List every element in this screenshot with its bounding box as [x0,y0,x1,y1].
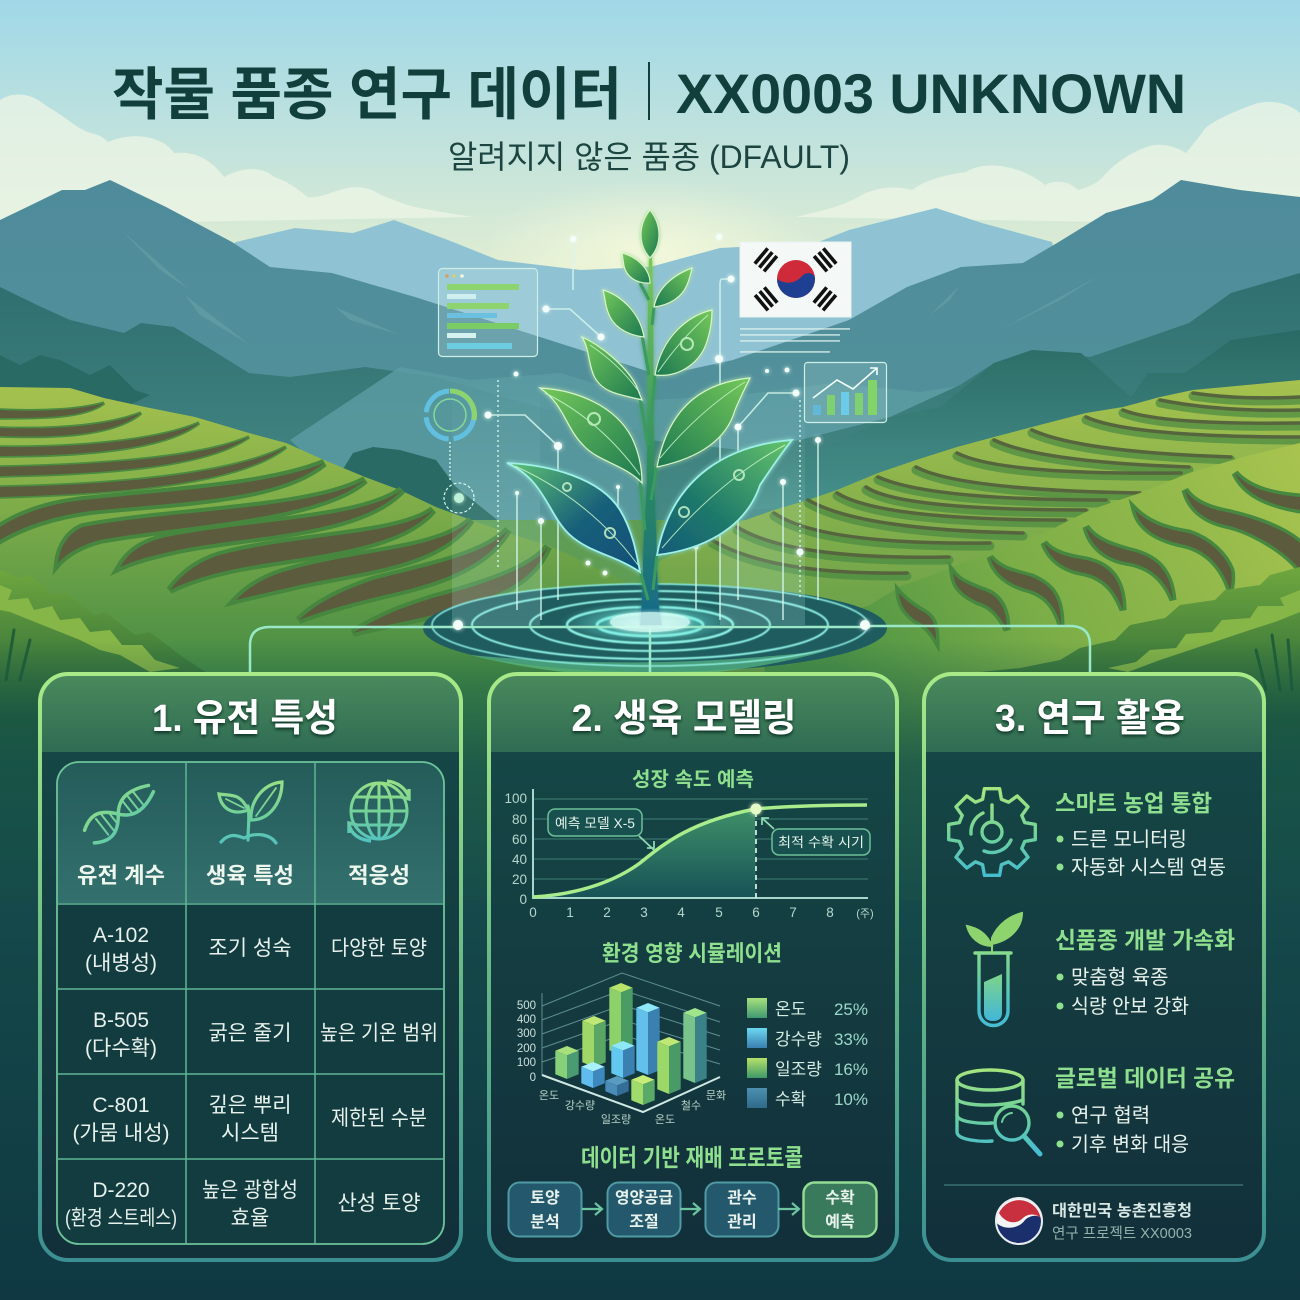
panel 2: growth modeling [489,674,897,1260]
panel 2 heading: 2. 생육 모델링 [572,698,796,740]
title [112,62,1186,127]
x axis labels: 3 [640,905,648,920]
table rows [65,924,438,1230]
step: yield forecast: 수확 [825,1189,855,1207]
left big mountain [0,180,648,432]
bars [555,983,707,1105]
right back terrace brown lines [712,393,1300,573]
y axis labels: 60 [512,832,527,847]
subtitle: 알려지지 않은 품종 (DFAULT) [448,139,850,175]
item: global data: 연구 협력 [1071,1104,1150,1127]
chart legend: 25% [834,1000,868,1019]
table rows: A-102 [93,924,149,947]
y axis labels: 100 [504,791,527,806]
title separator [648,62,650,120]
x axis labels: 4 [677,905,685,920]
chart legend: 일조량 [775,1060,822,1079]
lower dark background [0,640,1300,1300]
protocol flow [508,1182,876,1236]
callout: prediction model: 예측 모델 X-5 [555,816,635,831]
chart title: environment simulation: 환경 영향 시뮬레이션 [602,941,782,966]
line chart [504,789,874,920]
arrow [680,1203,700,1215]
panel 1: genetic traits [40,674,461,1260]
step: nutrient control: 조절 [629,1213,659,1231]
callout: optimal harvest [762,818,870,855]
bar chart y labels: 400 [517,1014,536,1026]
table header labels: 적응성 [348,863,410,888]
table rows: (다수확) [85,1037,157,1060]
item: smart farming: 자동화 시스템 연동 [1071,856,1226,879]
bar chart x labels: 철수 [681,1099,701,1112]
bar chart y labels [517,1000,536,1084]
bar chart x labels: 온도 [539,1089,559,1102]
step: soil analysis: 분석 [530,1213,560,1231]
grass dark blades [6,630,1292,690]
small target ring [444,483,474,513]
title code part: XX0003 UNKNOWN [676,62,1186,125]
icon: globe [349,781,409,841]
light blue back mountains [234,208,1053,376]
item: new variety: 신품종 개발 가속화 [1055,927,1235,953]
x axis labels: 2 [603,905,611,920]
callout: optimal harvest: 최적 수확 시기 [778,835,864,850]
panel 3 heading: 3. 연구 활용 [995,698,1185,740]
item: global data [957,1065,1235,1156]
chart legend: 수확 [775,1090,806,1109]
bar chart x labels: 온도 [655,1113,675,1126]
bar chart y labels: 100 [517,1057,536,1069]
right big mountain [654,180,1300,450]
project code: 연구 프로젝트 XX0003 [1052,1225,1192,1242]
item: new variety: 식량 안보 강화 [1071,995,1189,1018]
growth chart card [804,362,886,422]
item: global data: 글로벌 데이터 공유 [1055,1065,1235,1091]
table rows: (환경 스트레스) [65,1207,177,1230]
step: nutrient control: 영양공급 [615,1189,673,1207]
right front terrace steps [899,473,1300,640]
panel 3 header band [924,674,1264,752]
plant stem [640,255,662,625]
step: nutrient control [608,1182,680,1236]
plant branches [640,283,657,600]
glow behind plant [480,180,820,320]
panel 1 header band [40,674,461,752]
valley base [472,520,746,584]
table rows: 효율 [231,1207,269,1230]
trait table [57,762,444,1244]
arrow [582,1203,602,1215]
agency name: 대한민국 농촌진흥청 [1052,1202,1192,1220]
bar chart x labels: 일조량 [601,1112,631,1126]
step: irrigation: 관수 [727,1189,757,1207]
item: smart farming: 스마트 농업 통합 [1055,790,1212,816]
connector lines to panels [250,625,1090,672]
far forest ridges [0,287,394,450]
x axis labels: 6 [752,905,760,920]
x axis labels: 8 [826,905,834,920]
3D bar chart [517,973,726,1126]
item: new variety: 맞춤형 육종 [1071,966,1169,989]
step: irrigation [706,1182,778,1236]
protocol title: 데이터 기반 재배 프로토콜 [581,1145,803,1172]
central glow [610,612,690,632]
step: soil analysis [508,1182,582,1236]
x axis labels [529,905,874,920]
foreground grass [0,570,205,765]
step: yield forecast [804,1182,876,1236]
item: smart farming: 드른 모니터링 [1071,828,1187,851]
x axis labels: (주) [856,908,874,920]
hologram data dots [484,234,821,576]
clouds [0,95,1300,225]
icon: government emblem [996,1198,1042,1245]
data ring gauge [426,391,475,439]
hologram data lines [450,239,818,620]
left mountain facet [121,230,400,345]
plant [507,210,792,625]
table header labels [77,863,410,888]
table rows: C-801 [92,1094,150,1117]
connector node dots [453,620,870,630]
table rows: 높은 광합성 [202,1179,298,1202]
icon: database with magnifier [957,1070,1040,1154]
bar chart y labels: 200 [517,1043,536,1055]
table rows: (가뭄 내성) [72,1122,170,1145]
icon: test tube [967,913,1022,1026]
y axis labels [504,791,527,907]
hologram light columns [452,360,805,625]
data card: dashboard [438,268,538,356]
chart legend: 강수량 [775,1030,822,1049]
bar chart y labels: 300 [517,1028,536,1040]
table rows: 산성 토양 [337,1192,421,1215]
grass highlights [0,585,1300,672]
y axis labels: 20 [512,872,527,887]
chart legend: 10% [834,1090,868,1109]
panel 2 header band [489,674,897,752]
x axis labels: 7 [789,905,797,920]
y axis labels: 80 [512,812,527,827]
table rows: B-505 [93,1009,149,1032]
item: smart farming [949,789,1226,879]
plant leaves [507,210,792,572]
item: new variety [967,913,1235,1026]
bar chart y labels: 0 [530,1072,536,1084]
table rows: 시스템 [221,1122,279,1145]
table rows: 굵은 줄기 [208,1022,292,1045]
near dark forest [0,355,510,530]
y axis labels: 40 [512,852,527,867]
icon: sprout [219,782,282,843]
Korean flag [740,242,851,317]
table rows: 조기 성숙 [208,937,292,960]
flag caption lines [740,328,850,353]
x axis labels: 0 [529,905,537,920]
y axis labels: 0 [519,892,527,907]
table rows: 높은 기온 범위 [320,1022,438,1045]
right mountain facet [932,278,1096,326]
bar chart x labels: 문화 [706,1089,726,1102]
plant leaf veins and nodes [515,315,785,565]
x axis labels: 1 [566,905,574,920]
circuit disc [423,584,887,676]
arrow [778,1203,799,1215]
panel 1 heading: 1. 유전 특성 [152,698,338,740]
bar chart x labels: 강수량 [565,1099,595,1112]
landscape: mountains and terraces [0,180,1300,920]
chart legend: 16% [834,1060,868,1079]
background: sky [0,0,1300,300]
panel 3: research use [924,674,1264,1260]
table rows: 다양한 토양 [331,937,427,960]
left terrace hill [0,387,624,757]
chart legend: 33% [834,1030,868,1049]
icon: DNA [81,778,159,847]
table rows: 제한된 수분 [331,1107,427,1130]
table rows: (내병성) [85,952,157,975]
chart legend: 온도 [775,1000,806,1019]
x axis labels: 5 [715,905,723,920]
table header labels: 생육 특성 [206,863,294,888]
step: yield forecast: 예측 [825,1213,855,1231]
step: irrigation: 관리 [727,1213,757,1231]
table header labels: 유전 계수 [77,863,165,888]
callout: prediction model [548,809,654,850]
left terrace steps [0,403,548,633]
right front terrace hill [764,443,1300,748]
divider [944,1184,1243,1186]
icon: gear [949,789,1035,875]
step: soil analysis: 토양 [530,1189,560,1207]
right back terrace steps [712,396,1300,576]
table rows: 깊은 뿌리 [208,1094,292,1117]
bar chart y labels: 500 [517,1000,536,1012]
chart legend [747,998,868,1109]
chart title: growth rate: 성장 속도 예측 [632,768,754,791]
item: global data: 기후 변화 대응 [1071,1133,1189,1156]
table rows: D-220 [92,1179,150,1202]
right back terrace hill [657,380,1300,672]
title Korean part: 작물 품종 연구 데이터 [112,63,622,127]
bar chart x labels [539,1089,726,1126]
